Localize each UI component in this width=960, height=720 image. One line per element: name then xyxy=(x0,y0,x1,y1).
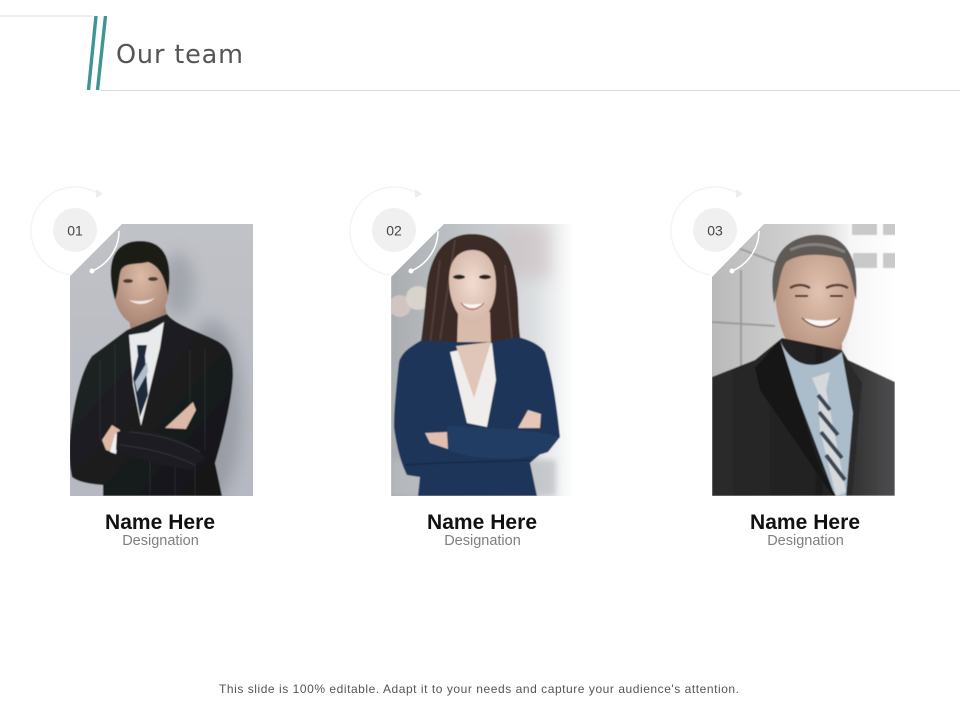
photo: smiling man with striped tie xyxy=(708,220,898,500)
badge 02 with circular arrow: 02 xyxy=(386,222,402,238)
badge 03 with circular arrow xyxy=(671,187,759,275)
photo: man with crossed arms xyxy=(66,220,256,500)
photo: woman in navy blazer xyxy=(389,220,574,500)
header rule lines xyxy=(0,16,960,90)
footer note: This slide is 100% editable. Adapt it to your needs and capture your audience's attention. xyxy=(219,682,739,696)
panel: team member 01 xyxy=(31,187,256,549)
badge 02 with circular arrow xyxy=(350,187,438,275)
panel: team member 03 xyxy=(671,187,898,549)
designation 02: Designation xyxy=(444,533,521,549)
icon: teal double slash xyxy=(88,16,106,90)
panel: team member 02 xyxy=(350,187,574,549)
name 02: Name Here xyxy=(427,511,537,534)
title: Our team xyxy=(116,40,243,70)
badge 03 with circular arrow: 03 xyxy=(707,222,723,238)
designation 01: Designation xyxy=(122,533,199,549)
name 03: Name Here xyxy=(750,511,860,534)
designation 03: Designation xyxy=(767,533,844,549)
badge 01 with circular arrow: 01 xyxy=(67,222,83,238)
badge 01 with circular arrow xyxy=(31,187,119,275)
name 01: Name Here xyxy=(105,511,215,534)
